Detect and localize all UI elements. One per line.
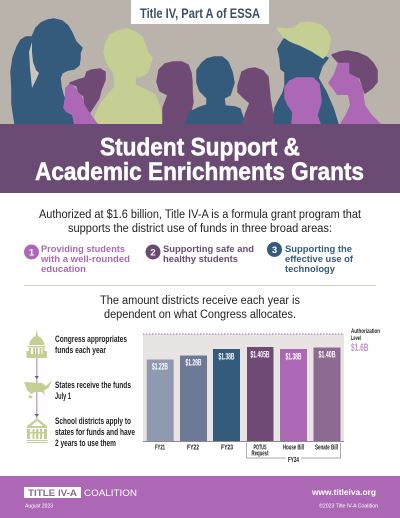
silhouette: purple student: [157, 62, 193, 124]
bar: Senate bill: [314, 348, 340, 442]
x-axis labels: Senate Bill: [315, 442, 338, 452]
silhouette: small child: [285, 78, 321, 124]
x-axis labels: House Bill: [283, 442, 304, 452]
step 1 text: Congress appropriates: [55, 334, 127, 345]
step 2 text: States receive the funds: [55, 380, 131, 391]
step 3 text: School districts apply to: [55, 416, 131, 427]
FY24 bracket: [246, 443, 340, 464]
step 1 text: [55, 334, 127, 356]
title banner: Student Support &: [100, 134, 300, 162]
coalition logo: [24, 487, 137, 498]
silhouette: student with cap: [274, 22, 338, 124]
hero illustration: student silhouettes: [0, 0, 400, 125]
authorization level callout: $1.6B: [351, 342, 369, 354]
copyright: ©2023 Title IV-A Coalition: [319, 502, 378, 510]
x-axis labels: [155, 442, 338, 458]
silhouette: blue student with curly hair: [185, 57, 245, 124]
silhouette: young man: [328, 51, 381, 124]
intro text: Authorized at $1.6 billion, Title IV-A is a formula grant program that: [39, 209, 362, 221]
area 3: effective use of technology: 3: [272, 245, 277, 256]
bar: FY21: [147, 360, 174, 442]
step 3 text: states for funds and have: [55, 427, 135, 438]
funding heading: dependent on what Congress allocates.: [104, 309, 296, 321]
authorization level callout: Level: [351, 335, 361, 342]
bar: FY22: [180, 356, 207, 442]
x-axis labels: Request: [252, 448, 269, 458]
intro text: supports the district use of funds in three broad areas:: [68, 223, 332, 235]
area 2: safe and healthy students: 2: [150, 248, 156, 258]
bar: FY21: $1.22B: [152, 362, 168, 372]
coalition logo: COALITION: [84, 488, 137, 498]
step 1 text: funds each year: [55, 345, 106, 356]
authorization level callout: Authorization: [351, 328, 380, 335]
coalition logo: TITLE IV-A: [28, 488, 78, 498]
silhouette: girl with ponytail: [11, 19, 82, 124]
icon: school building: [26, 418, 48, 443]
area 2: safe and healthy students: healthy students: [163, 254, 238, 265]
area 1: well-rounded education: [24, 244, 130, 275]
x-axis labels: POTUS: [254, 442, 266, 452]
funding heading: [100, 295, 300, 321]
bar chart: Title IV-A appropriations: [143, 334, 344, 464]
arrow: flow line with arrowheads: [34, 358, 39, 418]
subtitle tag: [131, 0, 269, 24]
area 3: effective use of technology: effective use of: [285, 254, 354, 265]
bar: House bill: $1.38B: [286, 352, 302, 362]
step 2 text: July 1: [55, 391, 71, 402]
title banner: [0, 124, 400, 193]
bar: FY23: [213, 349, 240, 442]
silhouette: green student: [92, 29, 163, 124]
area 2: safe and healthy students: [146, 244, 254, 265]
area 1: well-rounded education: with a well-rounded: [40, 254, 130, 265]
area 1: well-rounded education: Providing students: [41, 244, 125, 255]
x-axis labels: FY22: [187, 442, 199, 452]
x-axis labels: FY23: [221, 442, 233, 452]
silhouette: child with hair bun: [63, 69, 105, 124]
icon: United States map: [24, 380, 52, 398]
x-axis labels: FY21: [155, 442, 165, 452]
icon: capitol building: [26, 330, 47, 358]
bar: FY23: $1.38B: [218, 352, 235, 362]
area 2: safe and healthy students: Supporting safe and: [163, 244, 254, 255]
area 1: well-rounded education: education: [41, 264, 86, 275]
footer: [0, 476, 400, 518]
silhouette: purple student with braid: [238, 68, 277, 124]
date: August 2023: [25, 504, 53, 510]
step 3 text: 2 years to use them: [55, 438, 116, 449]
funding heading: The amount districts receive each year is: [100, 295, 300, 307]
FY24 bracket: FY24: [288, 455, 300, 464]
website: www.titleiva.org: [311, 488, 376, 497]
area 3: effective use of technology: Supporting the: [285, 244, 352, 255]
bar: POTUS request: $1.405B: [250, 350, 270, 360]
area 1: well-rounded education: 1: [29, 248, 35, 258]
title banner: Academic Enrichments Grants: [35, 158, 364, 186]
bar: FY22: $1.28B: [186, 358, 202, 368]
step 2 text: [55, 380, 131, 402]
step 3 text: [55, 416, 135, 449]
bar: Senate bill: $1.40B: [318, 350, 336, 360]
area 3: effective use of technology: technology: [285, 264, 336, 275]
bar: POTUS request: [247, 347, 274, 442]
subtitle tag: Title IV, Part A of ESSA: [140, 5, 260, 21]
area 3: effective use of technology: [267, 242, 354, 275]
authorization level callout: [351, 328, 380, 354]
intro text: [39, 209, 362, 235]
bar: House bill: [280, 349, 307, 442]
